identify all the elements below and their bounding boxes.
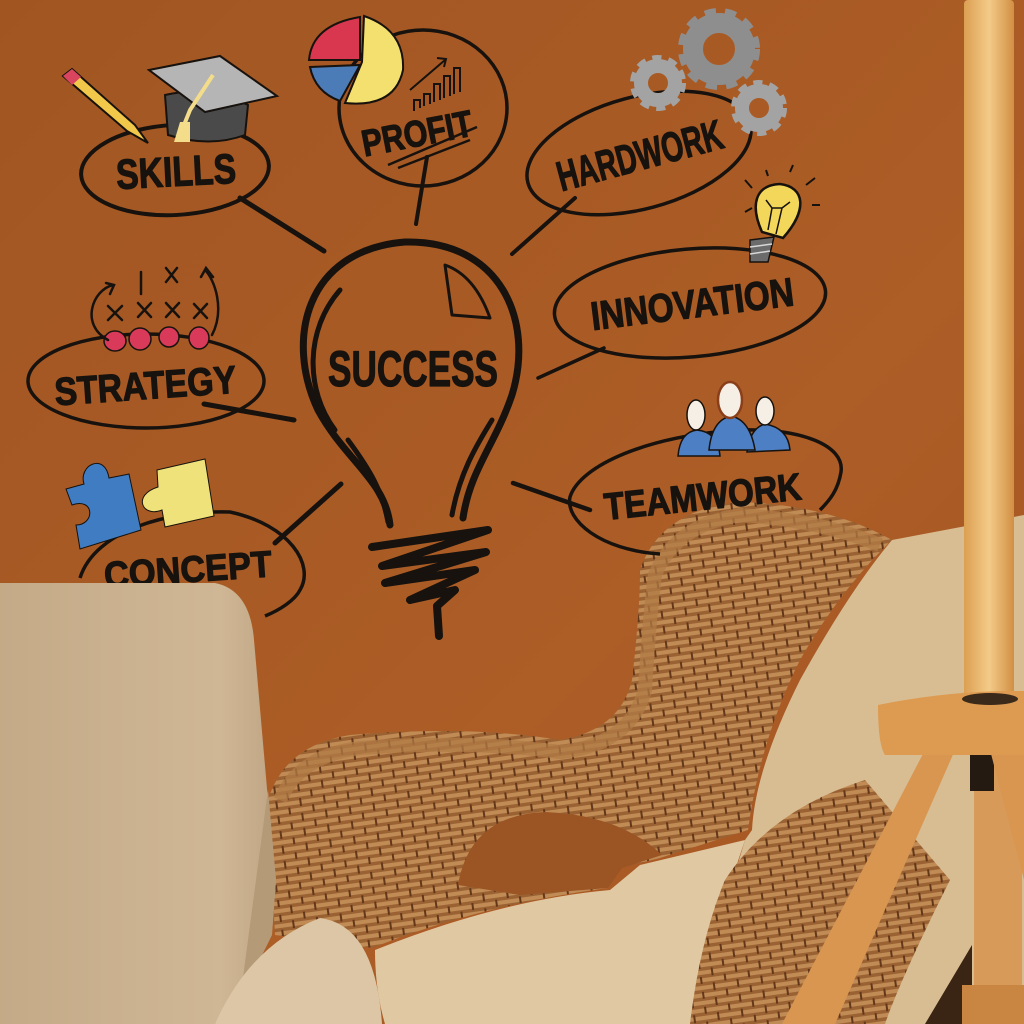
node: innovation <box>538 237 830 378</box>
beige sofa cushion <box>0 583 382 1024</box>
icon: pencil <box>63 69 148 143</box>
icon: pie chart <box>309 16 403 104</box>
text: success: SUCCESS <box>328 341 498 397</box>
cream blanket <box>375 515 1024 1024</box>
lamp tripod <box>782 691 1024 1024</box>
chair seat opening <box>458 812 662 895</box>
node: profit: PROFIT <box>358 103 476 164</box>
node: skills <box>79 120 324 251</box>
icon: team people <box>678 382 790 456</box>
chair rim highlight <box>280 515 880 800</box>
floor lamp pole <box>964 0 1014 700</box>
icon: small bulb <box>745 165 820 262</box>
central bulb <box>303 242 519 636</box>
node: profit <box>339 30 507 224</box>
node: teamwork: TEAMWORK <box>602 466 804 529</box>
node: strategy <box>28 334 294 428</box>
node: concept <box>80 484 341 616</box>
dark corner <box>925 945 972 1024</box>
wicker chair <box>268 502 892 948</box>
node: hardwork <box>512 69 765 254</box>
front wicker armrest <box>690 780 950 1024</box>
node: skills: SKILLS <box>115 145 237 198</box>
icon: gears <box>633 12 784 133</box>
node: innovation: INNOVATION <box>588 270 796 339</box>
node: teamwork <box>513 430 841 554</box>
node: strategy: STRATEGY <box>53 359 238 414</box>
node: concept: CONCEPT <box>103 543 274 596</box>
node: hardwork: HARDWORK <box>552 111 728 200</box>
icon: puzzle pieces <box>66 459 214 549</box>
icon: strategy play <box>92 268 218 351</box>
icon: graduation cap <box>149 56 277 142</box>
